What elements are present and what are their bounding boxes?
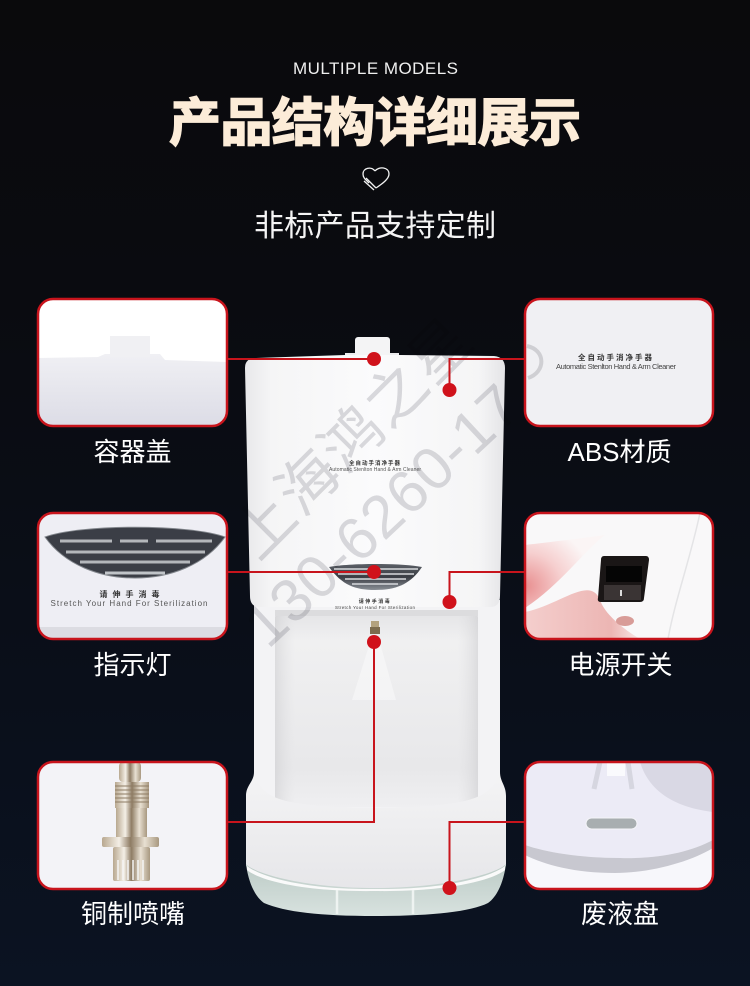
body label: [329, 459, 421, 473]
hand prompt text: [335, 598, 415, 610]
indicator close-up prompt: 请伸手消毒: [100, 589, 164, 600]
dispenser middle column: [254, 600, 500, 815]
callout: indicator light: [227, 565, 381, 579]
ABS close-up label: Automatic Stenlton Hand & Arm Cleaner: [556, 362, 676, 371]
label: ABS material: ABS材质: [567, 437, 672, 467]
tray close-up surface: [525, 762, 713, 858]
label: indicator light: 指示灯: [93, 650, 172, 680]
label: container cap: 容器盖: [93, 437, 172, 467]
eyebrow: multiple models: MULTIPLE MODELS: [293, 59, 458, 78]
label: waste tray: 废液盘: [581, 899, 659, 929]
label: power switch: 电源开关: [568, 650, 673, 680]
panel: waste tray: [525, 762, 713, 889]
body label: 全自动手消净手器: [349, 459, 401, 467]
indicator close-up prompt: Stretch Your Hand For Sterilization: [50, 599, 208, 608]
callout: copper nozzle: [227, 635, 381, 822]
power switch: [598, 556, 649, 602]
label: copper nozzle: 铜制喷嘴: [81, 899, 185, 929]
indicator close-up prompt: [50, 590, 207, 606]
dispenser waste tray: [246, 864, 506, 916]
callout: ABS material: [442, 359, 525, 397]
cap close-up knob: [110, 336, 150, 354]
dispenser cap: [345, 337, 399, 359]
hand prompt text: 请伸手消毒: [359, 598, 391, 605]
dispenser lower body: [246, 772, 506, 892]
panel: container cap: [38, 299, 227, 426]
dispenser upper body: [245, 355, 505, 607]
nozzle on product: [370, 621, 380, 634]
watermark: 130-6260-17: [231, 371, 534, 660]
tray close-up slot: [586, 818, 637, 829]
panel: copper nozzle: [38, 762, 227, 889]
subtitle: 非标产品支持定制: [254, 201, 496, 245]
title: 产品结构详细展示: [169, 81, 581, 156]
callout: container cap: [227, 352, 381, 366]
ABS close-up label: [556, 353, 676, 369]
panel: ABS material: [525, 299, 713, 426]
callout: waste tray: [442, 822, 525, 895]
nozzle close-up: [102, 762, 159, 881]
watermark: 上海鸿之星: [209, 294, 490, 575]
panel: power switch: [525, 513, 713, 639]
panel: indicator light: [38, 513, 227, 639]
body label: Automatic Stenlton Hand & Arm Cleaner: [329, 467, 421, 473]
product: dispenser: [245, 337, 506, 916]
indicator lens: [329, 564, 422, 590]
icon: heart: [363, 168, 389, 190]
callout: power switch: [442, 572, 525, 609]
ABS close-up label: 全自动手消净手器: [578, 352, 654, 363]
hand prompt text: Stretch Your Hand For Sterilization: [335, 605, 415, 610]
cap close-up body: [38, 354, 227, 426]
indicator close-up lens: [45, 527, 225, 578]
